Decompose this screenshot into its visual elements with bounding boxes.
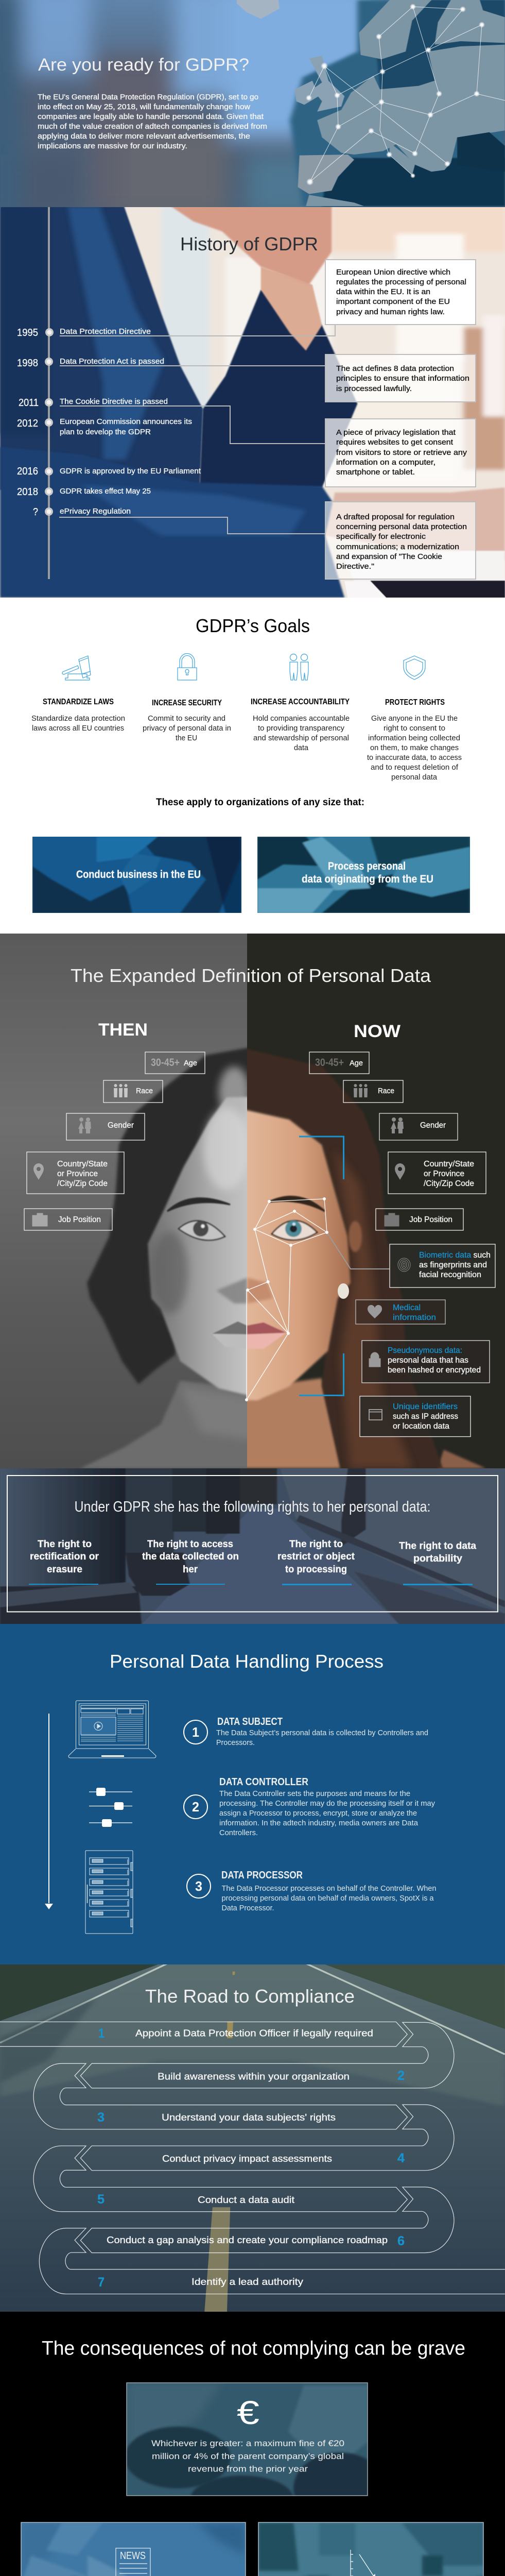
right: access collected data (142, 1539, 239, 1585)
step 4: privacy impact assessments: 4 (397, 2151, 405, 2165)
callout: Data Protection Act (325, 354, 476, 402)
network lines on map (309, 7, 505, 182)
process title: Personal Data Handling Process (110, 1651, 384, 1672)
portrait: colour NOW half (227, 934, 505, 1468)
goal: standardize laws (31, 698, 125, 733)
step 2: build awareness: Build awareness within your organization (158, 2071, 350, 2081)
NOW tag: age: Age (350, 1059, 363, 1067)
icon: fingerprint (398, 1258, 410, 1272)
icon: laptop with video player (68, 1701, 156, 1758)
timeline years: 1998 (17, 358, 38, 369)
step 1: data subject: 1 (192, 1724, 199, 1740)
timeline event labels: European Commission announces its (60, 417, 192, 426)
biometric blue corner bottom (299, 1353, 344, 1395)
heading: now: NOW (354, 1022, 401, 1041)
timeline event labels: GDPR is approved by the EU Parliament (60, 467, 201, 476)
right: data portability: The right to data (399, 1540, 476, 1552)
THEN tag: gender: Gender (108, 1121, 134, 1130)
icon: padlock (369, 1352, 380, 1367)
right: restrict or object: The right to (289, 1539, 343, 1550)
icon: man and woman (78, 1117, 91, 1133)
step 2: build awareness (158, 2069, 405, 2083)
timeline line (48, 207, 50, 579)
timeline years (17, 327, 39, 518)
panel: personal data handling process (0, 1624, 505, 1964)
step 2: data controller: information. In the adtech industry, media owners are Data (219, 1819, 419, 1827)
callout: Data Protection Directive: privacy and human rights law. (336, 308, 445, 316)
step 7: lead authority: 7 (98, 2275, 105, 2290)
timeline dots (45, 328, 54, 516)
right: rectification or erasure (29, 1539, 99, 1585)
map of Europe (237, 0, 505, 206)
timeline years: ? (33, 506, 38, 518)
NOW tag: location: Country/State (424, 1160, 474, 1168)
NOW tag: medical information (356, 1300, 445, 1324)
card: conduct business: Conduct business in the EU (76, 869, 201, 880)
right: access collected data: the data collected on (142, 1551, 239, 1562)
panel: consequences (0, 2312, 505, 2576)
step 7: lead authority (98, 2275, 304, 2290)
callout: Cookie Directive: A piece of privacy legislation that (336, 429, 456, 437)
portrait: monochrome THEN half (0, 934, 268, 1468)
step 3: data processor: 3 (195, 1878, 202, 1894)
icon: newspaper (116, 2548, 150, 2576)
THEN tag: location: or Province (57, 1170, 98, 1178)
winding ribbon road (0, 2022, 505, 2294)
timeline event labels (60, 327, 201, 516)
goal: protect rights (367, 698, 462, 782)
goal: increase security: Commit to security and (148, 715, 225, 723)
goal: protect rights: right to consent to (384, 724, 445, 733)
goals title: GDPR’s Goals (196, 615, 310, 636)
card: bad press (21, 2522, 246, 2576)
step 5: data audit (97, 2192, 294, 2207)
callout: Cookie Directive: from visitors to store or retrieve any (336, 449, 467, 457)
NOW tag: biometric data: Biometric data such (419, 1251, 491, 1260)
panel: GDPR's goals (0, 598, 505, 934)
right: data portability: portability (413, 1553, 462, 1564)
goal: increase security (143, 699, 231, 742)
right: restrict or object (277, 1539, 355, 1585)
right: restrict or object: to processing (285, 1564, 347, 1575)
timeline years: 2012 (17, 418, 38, 429)
callout: ePrivacy Regulation: Directive." (336, 563, 374, 571)
callout: Data Protection Act: principles to ensure that information (336, 375, 469, 383)
section title: The Expanded Definition of Personal Data (71, 965, 431, 986)
callout: Data Protection Act: The act defines 8 data protection (336, 365, 454, 373)
callout: Cookie Directive (325, 419, 476, 487)
icon: heart (368, 1305, 382, 1318)
timeline years: 2011 (19, 397, 39, 409)
icon: man and woman (391, 1117, 404, 1133)
NOW tag: medical information: information (393, 1313, 436, 1322)
goal: protect rights: PROTECT RIGHTS (385, 698, 445, 707)
facial recognition mesh (245, 1197, 390, 1401)
hero title: Are you ready for GDPR? (38, 55, 249, 75)
NOW tag: job (376, 1209, 463, 1230)
card: process personal data (257, 837, 470, 913)
icon: newspaper: NEWS (120, 2550, 146, 2562)
step 3: understand rights: 3 (97, 2110, 105, 2125)
step 7: lead authority: Identify a lead authority (191, 2276, 304, 2287)
then-and-now portrait (0, 934, 505, 1468)
callout: Data Protection Directive: important component of the EU (336, 298, 450, 306)
callout: ePrivacy Regulation: communications; a modernization (336, 543, 459, 551)
applies-to heading: These apply to organizations of any size that: (156, 797, 364, 808)
icon: euro sign: € (237, 2394, 259, 2431)
right: rectification or erasure: rectification or (30, 1551, 99, 1562)
timeline event labels: ePrivacy Regulation (60, 507, 131, 516)
goal: increase accountability: and stewardship of personal (253, 734, 349, 742)
NOW tag: biometric data: as fingerprints and (419, 1261, 487, 1269)
timeline dot centers (46, 330, 51, 514)
step 3: data processor: Data Processor. (221, 1904, 274, 1912)
step 3: data processor: processing personal data on behalf of media owners, SpotX is a (221, 1894, 434, 1903)
card: loss of customers (258, 2522, 483, 2576)
process background (0, 1624, 505, 1964)
icon: group of three people (114, 1084, 128, 1097)
icon: padlock (178, 653, 197, 680)
panel: data subject rights (0, 1468, 505, 1624)
road title: The Road to Compliance (145, 1986, 355, 2007)
right: restrict or object: restrict or object (277, 1551, 355, 1562)
NOW tag: pseudonymous data (362, 1341, 490, 1383)
step 3: data processor: DATA PROCESSOR (221, 1870, 303, 1881)
road background photo (0, 1963, 505, 2312)
hero intro paragraph: into effect on May 25, 2018, will fundamentally change how (38, 103, 251, 111)
goal: standardize laws: laws across all EU countries (32, 724, 124, 733)
white frame (7, 1476, 498, 1612)
step 6: gap analysis: 6 (397, 2234, 405, 2248)
goal: protect rights: personal data (391, 773, 438, 782)
NOW tag: gender (379, 1113, 458, 1140)
card: fine: Whichever is greater: a maximum fine of €20 (151, 2438, 344, 2448)
hero intro paragraph: much of the value creation of adtech companies is derived from (38, 123, 267, 131)
step 6: gap analysis (107, 2234, 405, 2248)
icon: sliders (89, 1788, 132, 1827)
callout: ePrivacy Regulation: and expansion of "The Cookie (336, 553, 442, 561)
THEN tag: race: Race (136, 1087, 153, 1095)
goal: increase accountability: to providing transparency (258, 724, 345, 733)
right: access collected data: her (183, 1564, 198, 1575)
step 1: data subject (184, 1716, 428, 1747)
icon: group of three people (354, 1084, 368, 1097)
step 3: data processor: The Data Processor processes on behalf of the Controller. When (221, 1885, 437, 1893)
step 1: data subject: Processors. (216, 1739, 255, 1747)
step 1: data subject: The Data Subject’s personal data is collected by Controllers and (216, 1729, 428, 1737)
callout: Data Protection Act: is processed lawfully. (336, 385, 412, 393)
callout: Cookie Directive: information on a computer, (336, 459, 436, 467)
THEN tag: location: /City/Zip Code (57, 1179, 108, 1188)
card: fine (125, 2383, 386, 2524)
hero intro paragraph (38, 93, 267, 150)
step 3: understand rights: Understand your data subjects' rights (162, 2112, 336, 2123)
step 5: data audit: 5 (97, 2192, 105, 2207)
right: access collected data: The right to access (147, 1539, 233, 1550)
NOW tag: age (309, 1052, 369, 1074)
card: conduct business (32, 837, 241, 913)
THEN tag: age: Age (184, 1059, 197, 1067)
colonnade background photo (0, 1468, 505, 1624)
step 2: data controller: Controllers. (219, 1829, 258, 1837)
callout: ePrivacy Regulation: A drafted proposal for regulation (336, 513, 455, 521)
step 1: appoint a DPO: Appoint a Data Protection Officer if legally required (135, 2028, 373, 2038)
icon: browser window (369, 1410, 382, 1420)
hero background photo (0, 0, 505, 216)
NOW tag: race (343, 1080, 403, 1103)
step 3: understand rights (97, 2110, 336, 2125)
THEN tag: job (24, 1209, 112, 1230)
callout: Data Protection Directive: regulates the processing of personal (336, 278, 466, 286)
step 5: data audit: Conduct a data audit (198, 2194, 294, 2205)
step 1: appoint a DPO: 1 (98, 2026, 105, 2041)
NOW tag: biometric data: facial recognition (419, 1270, 481, 1279)
icon: server rack (85, 1851, 133, 1934)
step 2: data controller: DATA CONTROLLER (219, 1776, 308, 1788)
goal: increase accountability (251, 698, 350, 752)
icon: map pin (395, 1163, 405, 1180)
icon: briefcase (32, 1213, 47, 1226)
NOW tag: unique identifiers: Unique identifiers (393, 1402, 458, 1411)
NOW tag: medical information: Medical (393, 1303, 421, 1312)
step 1: data subject: DATA SUBJECT (217, 1716, 283, 1727)
consequences title: The consequences of not complying can be grave (42, 2338, 465, 2360)
hero intro paragraph: implications are massive for our industry. (38, 142, 187, 150)
NOW tag: age: 30-45+ (315, 1057, 344, 1069)
timeline event labels: The Cookie Directive is passed (60, 397, 168, 406)
THEN tag: age (145, 1052, 205, 1074)
callout: Cookie Directive: requires websites to get consent (336, 438, 453, 447)
step 2: data controller: 2 (192, 1799, 199, 1815)
timeline years: 2016 (17, 466, 38, 477)
callout: ePrivacy Regulation: concerning personal data protection (336, 523, 467, 531)
NOW tag: pseudonymous data: Pseudonymous data: (388, 1346, 462, 1355)
timeline years: 1995 (17, 327, 38, 338)
timeline years: 2018 (17, 486, 38, 498)
NOW tag: location: or Province (424, 1170, 464, 1178)
card: process personal data: data originating from the EU (302, 873, 433, 885)
heading: then: THEN (98, 1020, 148, 1040)
callout: Data Protection Directive: data within the EU. It is an (336, 288, 430, 296)
step 2: data controller: assign a Processor to process, encrypt, store or analyze the (219, 1809, 417, 1818)
step 4: privacy impact assessments (162, 2151, 405, 2165)
callout: Data Protection Directive (325, 260, 476, 325)
connector lines (59, 325, 335, 534)
NOW tag: job: Job Position (409, 1215, 452, 1224)
step 6: gap analysis: Conduct a gap analysis and create your compliance roadmap (107, 2234, 388, 2245)
icon: gavel (62, 656, 91, 680)
callout: Data Protection Directive: European Union directive which (336, 268, 450, 277)
callout: ePrivacy Regulation (325, 502, 476, 579)
THEN tag: location: Country/State (57, 1160, 108, 1168)
callout: Cookie Directive: smartphone or tablet. (336, 468, 415, 477)
timeline event labels: Data Protection Directive (60, 327, 151, 336)
icon: map pin (33, 1163, 44, 1180)
icon: shield (404, 656, 425, 680)
history background photo (0, 206, 505, 598)
step 2: data controller (184, 1776, 436, 1837)
NOW tag: unique identifiers (360, 1396, 471, 1436)
NOW tag: biometric data (390, 1244, 495, 1287)
card: fine: revenue from the prior year (188, 2464, 308, 2474)
timeline event labels: Data Protection Act is passed (60, 357, 164, 366)
right: rectification or erasure: The right to (38, 1539, 92, 1550)
hero intro paragraph: applying data to deliver more relevant advertisements, the (38, 132, 250, 141)
step 4: privacy impact assessments: Conduct privacy impact assessments (162, 2153, 332, 2164)
THEN tag: race (103, 1080, 163, 1103)
timeline event labels: plan to develop the GDPR (60, 428, 151, 436)
goal: protect rights: to inaccurate data, to access (367, 754, 462, 762)
goal: increase accountability: INCREASE ACCOUNTABILITY (251, 698, 350, 706)
NOW tag: pseudonymous data: been hashed or encrypted (388, 1366, 481, 1375)
panel: hero (0, 0, 505, 216)
icon: declining chart (351, 2550, 387, 2576)
goal: protect rights: on them, to make changes (370, 744, 459, 752)
THEN tag: gender (66, 1113, 145, 1140)
NOW tag: location: /City/Zip Code (424, 1179, 474, 1188)
step 2: data controller: processing. The Controller may do the processing itself or it may (219, 1800, 436, 1808)
arrow: process flow (45, 1714, 53, 1909)
hero intro paragraph: companies are legally able to handle personal data. Given that (38, 113, 264, 121)
icon: briefcase (385, 1213, 399, 1226)
history title: History of GDPR (180, 233, 318, 255)
NOW tag: unique identifiers: or location data (393, 1422, 449, 1431)
goal: increase accountability: data (294, 744, 309, 752)
icon: two people (290, 654, 308, 680)
goal: standardize laws: STANDARDIZE LAWS (43, 698, 114, 706)
goals background (0, 598, 505, 934)
THEN tag: job: Job Position (58, 1215, 101, 1224)
step 2: data controller: The Data Controller sets the purposes and means for the (219, 1790, 410, 1798)
goal: protect rights: Give anyone in the EU the (371, 715, 458, 723)
step 1: appoint a DPO (98, 2026, 373, 2041)
goal: protect rights: information being collected (368, 734, 460, 742)
panel: road to compliance (0, 1963, 505, 2312)
goal: increase accountability: Hold companies accountable (253, 715, 350, 723)
timeline event labels: GDPR takes effect May 25 (60, 487, 151, 496)
hero intro paragraph: The EU's General Data Protection Regulation (GDPR), set to go (38, 93, 258, 101)
NOW tag: race: Race (378, 1087, 394, 1095)
goal: increase security: INCREASE SECURITY (152, 699, 222, 707)
THEN tag: location (27, 1152, 124, 1194)
step 2: build awareness: 2 (397, 2069, 405, 2083)
panel: expanded definition of personal data (0, 934, 505, 1468)
network nodes on map (306, 4, 485, 185)
NOW tag: location (388, 1152, 486, 1194)
right: data portability (399, 1540, 476, 1585)
goal: standardize laws: Standardize data protection (31, 715, 125, 723)
panel: history of GDPR (0, 206, 505, 598)
callout: ePrivacy Regulation: specifically for electronic (336, 533, 426, 541)
NOW tag: gender: Gender (420, 1121, 446, 1130)
goal: protect rights: and to request deletion of (371, 764, 459, 772)
THEN tag: age: 30-45+ (151, 1057, 180, 1069)
goal: increase security: privacy of personal data in (143, 724, 231, 733)
rights heading: Under GDPR she has the following rights to her personal data: (74, 1499, 430, 1515)
card: fine: million or 4% of the parent company’s global (152, 2451, 344, 2461)
card: process personal data: Process personal (328, 860, 406, 872)
NOW tag: pseudonymous data: personal data that has (388, 1356, 468, 1365)
consequences background (0, 2312, 505, 2576)
step 3: data processor (187, 1870, 437, 1912)
NOW tag: unique identifiers: such as IP address (393, 1412, 458, 1421)
goal: increase security: the EU (176, 734, 197, 742)
biometric blue corner top (299, 1137, 344, 1179)
right: rectification or erasure: erasure (47, 1564, 82, 1575)
